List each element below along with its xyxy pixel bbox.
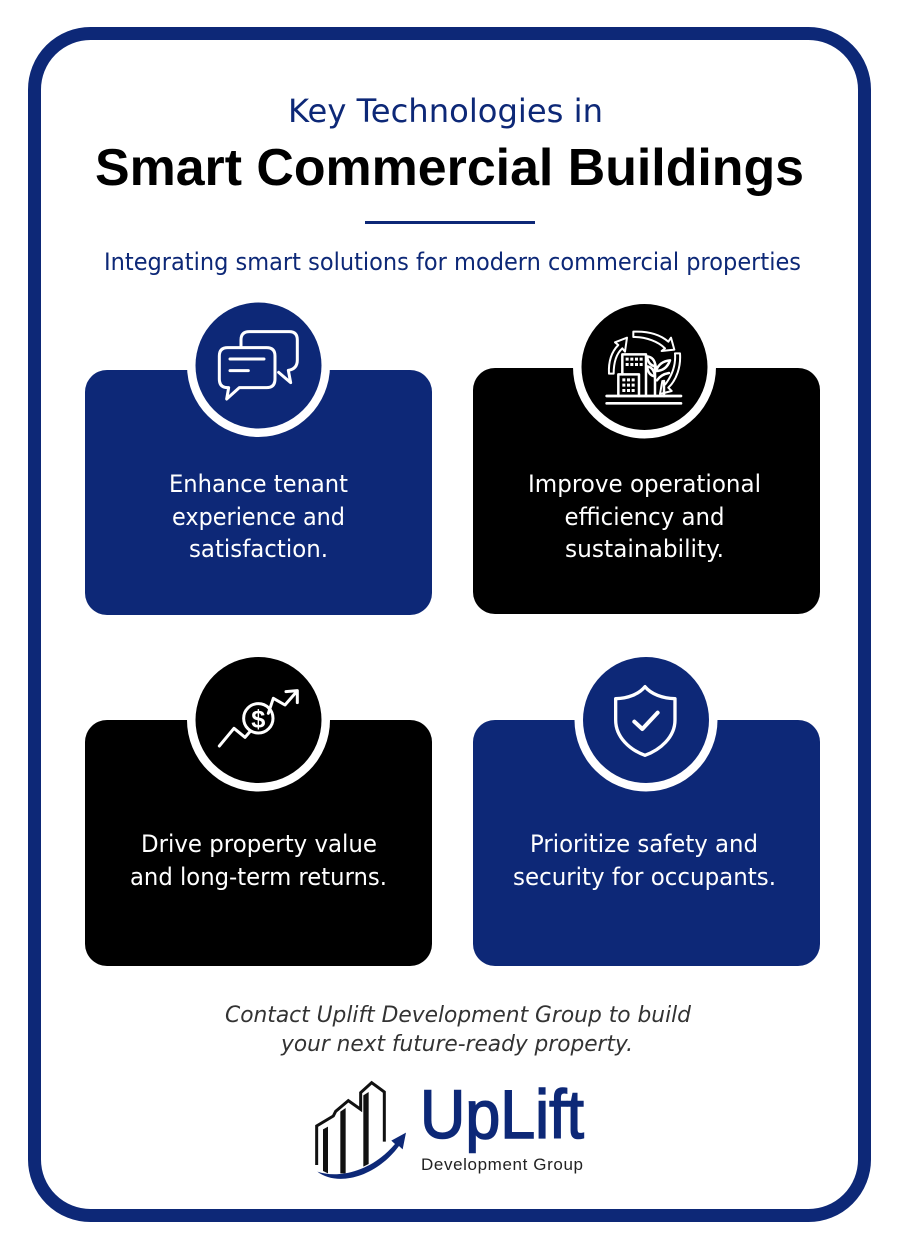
card text: sustainability. — [565, 535, 724, 563]
icon badge circle — [196, 657, 322, 783]
card text: experience and — [172, 503, 345, 531]
call to action: Contact Uplift Development Group to build — [225, 1003, 692, 1028]
subtitle: Integrating smart solutions for modern commercial properties — [104, 248, 801, 276]
panel: tenant experience — [85, 294, 432, 615]
panel: operational efficiency — [473, 296, 820, 614]
logo mark: buildings and arrow — [317, 1083, 406, 1179]
icon badge circle — [582, 304, 708, 430]
icon: sustainable buildings — [607, 332, 681, 403]
icon: rising dollar chart: $ — [251, 705, 265, 733]
title — [95, 92, 804, 197]
icon: shield with check — [616, 687, 675, 755]
card text: Drive property value — [141, 830, 377, 858]
panel: property value — [85, 648, 432, 966]
card background — [473, 368, 820, 614]
icon badge ring — [187, 648, 330, 792]
card text: satisfaction. — [189, 535, 328, 563]
card text: and long-term returns. — [130, 863, 387, 891]
icon badge ring — [573, 296, 716, 438]
logo wordmark: UpLift — [420, 1076, 584, 1153]
title line 2: Smart Commercial Buildings — [95, 139, 804, 197]
icon badge circle — [196, 302, 322, 428]
card background — [85, 720, 432, 966]
icon badge ring — [574, 648, 718, 792]
title line 1: Key Technologies in — [288, 92, 603, 130]
logo: UpLift Development Group — [317, 1076, 584, 1179]
icon: chat bubbles — [219, 332, 297, 399]
card text: security for occupants. — [513, 863, 776, 891]
card text: Prioritize safety and — [530, 830, 758, 858]
icon: rising dollar chart — [219, 691, 297, 746]
card text: efficiency and — [564, 503, 724, 531]
card background — [473, 720, 820, 966]
card text: Improve operational — [528, 470, 761, 498]
icon badge circle — [583, 657, 709, 783]
call to action: your next future-ready property. — [280, 1032, 633, 1057]
card background — [85, 370, 432, 615]
logo tagline: Development Group — [421, 1155, 583, 1174]
icon badge ring — [187, 294, 330, 437]
card text: Enhance tenant — [169, 470, 348, 498]
panel: safety and security — [473, 648, 820, 966]
